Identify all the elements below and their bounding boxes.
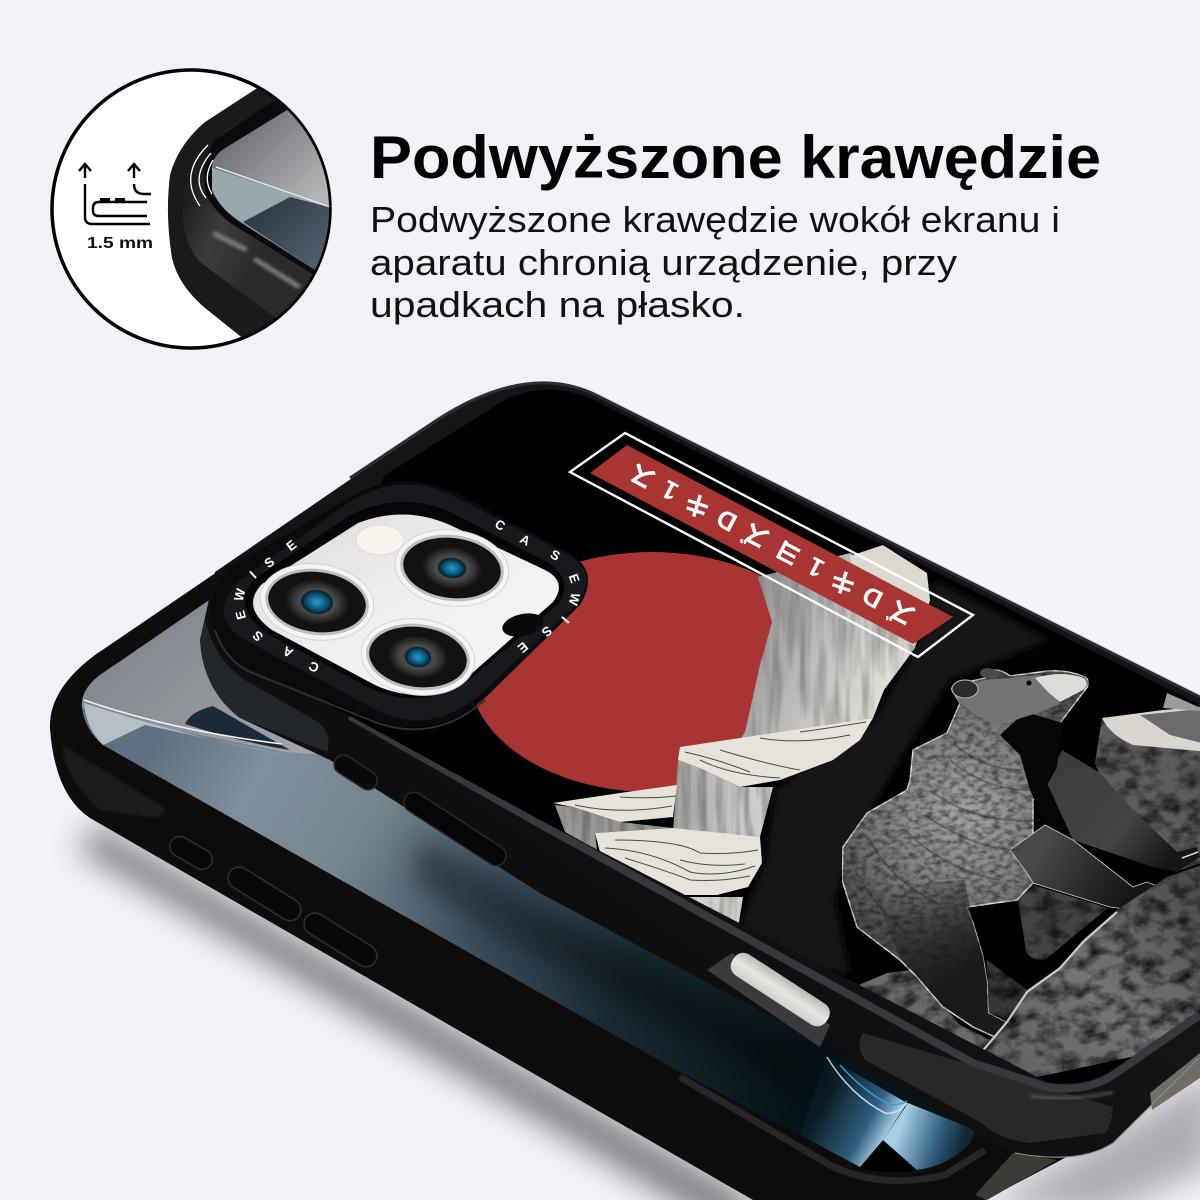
right rock block: [1095, 718, 1200, 870]
artwork black ground: [280, 370, 1200, 1100]
bear head: [953, 675, 1060, 725]
red sun: [476, 552, 772, 792]
shadows under the phones: [80, 825, 1200, 1200]
contour lines: [575, 722, 866, 880]
side buttons, back phone: [166, 833, 381, 971]
speaker grille: [1150, 1053, 1200, 1110]
microphone hole: [500, 610, 546, 640]
body text: upadkach na płasko.: [370, 284, 745, 325]
camera module: [211, 481, 588, 729]
screen glare arc: [84, 700, 282, 744]
ink wash: [740, 580, 1050, 975]
brand lettering on ring: A: [517, 531, 533, 549]
brand lettering on ring: [231, 516, 583, 676]
brand lettering on ring: C: [306, 658, 322, 676]
brand lettering on ring: C: [492, 516, 508, 534]
front phone case: [200, 383, 1200, 1157]
brand lettering on ring: I: [559, 614, 572, 626]
body text: aparatu chronią urządzenie, przy: [370, 242, 957, 283]
lettered ring: [224, 484, 586, 720]
shadow cast on back screen by front phone: [410, 835, 830, 1100]
rock block cap: [1102, 706, 1200, 752]
wallpaper arcs: [827, 1057, 907, 1113]
bear collar shadow: [1000, 712, 1067, 835]
bear claws: [1182, 851, 1198, 859]
raised edge arcs: [191, 145, 213, 206]
translucent bumper, back phone corner: [62, 745, 165, 818]
lens left: [256, 557, 378, 647]
sheen highlights: [215, 234, 298, 286]
body text: Podwyższone krawędzie wokół ekranu i: [370, 199, 1060, 240]
inner bevel highlight: [350, 716, 1200, 1088]
corner sheen: [1030, 1092, 1113, 1098]
lens top right: [391, 523, 513, 613]
rock crest highlight: [975, 912, 1117, 1060]
bear eye: [1026, 680, 1032, 686]
screen lower: [212, 168, 329, 269]
back phone screen: [82, 490, 1000, 1173]
brand lettering on ring: I: [247, 568, 259, 581]
brand lettering on ring: E: [566, 572, 583, 585]
paper sheet 1: [678, 718, 873, 787]
icon: raised edge diagram: [79, 164, 151, 224]
rock between legs: [987, 885, 1108, 1020]
brand lettering on ring: S: [548, 546, 563, 564]
case outer rim line: [1015, 1057, 1200, 1157]
bear neck fur strokes: [855, 745, 1040, 940]
screen glare line: [216, 167, 330, 207]
navy patch beneath camera corner: [185, 706, 290, 750]
brand lettering on ring: E: [514, 639, 531, 656]
brand lettering on ring: S: [249, 628, 266, 645]
upper mountain: [740, 553, 930, 740]
camera window: [253, 514, 559, 694]
banner red band: [590, 445, 953, 644]
title: Podwyższone krawędzie: [370, 124, 1101, 191]
lower rock faces: [555, 760, 773, 928]
back phone rim sheen: [680, 1077, 985, 1181]
top edge highlight: [350, 383, 1200, 697]
mountain snow cap: [850, 545, 930, 646]
body text: [370, 199, 1060, 325]
brand lettering on ring: E: [283, 537, 300, 554]
black wallpaper peak: [860, 1142, 917, 1172]
phone case artwork: [280, 370, 1200, 1100]
brand lettering on ring: S: [261, 554, 278, 571]
bear near arm: [1010, 825, 1167, 910]
bear hind leg: [882, 880, 1006, 1036]
rock cap shaded top: [1140, 710, 1200, 742]
detail circle: raised edge close-up: [52, 70, 340, 348]
banner outline: [570, 433, 973, 657]
brand lettering on ring: E: [232, 609, 249, 621]
soft bumper near camera: [200, 620, 329, 752]
ground rock left: [859, 970, 990, 1049]
screen upper grey wedge: [82, 490, 370, 755]
banner lettering: ズDキ1ヨズDキ1ス: [619, 454, 920, 632]
case corner close-up: [168, 88, 276, 338]
bear muzzle: [1035, 674, 1087, 702]
bear small ear: [980, 668, 996, 678]
blue wallpaper fan right: [883, 1103, 975, 1170]
screen top: [212, 110, 329, 206]
lens bottom: [357, 612, 479, 702]
camera outer lip: [211, 481, 588, 727]
back phone right end: [975, 1153, 1057, 1200]
charging port pill: [726, 949, 834, 1031]
lip lower sheen: [215, 630, 485, 729]
pale glass sliver: [84, 703, 285, 755]
thickness label: 1.5 mm: [87, 235, 153, 252]
flash: [356, 525, 404, 555]
side button: [400, 788, 510, 870]
charging port surround: [707, 953, 830, 1047]
translucent bumper, corner: [859, 1033, 1113, 1143]
big right rock: [973, 862, 1200, 1085]
side switch: [330, 751, 381, 793]
bear silhouette: [842, 670, 1088, 1038]
bear: [842, 668, 1200, 1038]
bear far arm: [1047, 750, 1200, 872]
paper sheet 3: [595, 828, 762, 895]
brand lettering on ring: S: [538, 623, 555, 640]
brand lettering on ring: W: [231, 586, 249, 603]
inner rim: [244, 502, 564, 698]
blue wallpaper fan left: [800, 1057, 907, 1167]
brand lettering on ring: W: [565, 591, 583, 608]
back phone case: [50, 478, 1080, 1200]
bear ear: [952, 680, 978, 698]
brand lettering on ring: A: [280, 643, 296, 661]
far rock: [1163, 693, 1200, 712]
paper sheet 2: [553, 785, 677, 822]
dark screen panel: [243, 197, 329, 270]
